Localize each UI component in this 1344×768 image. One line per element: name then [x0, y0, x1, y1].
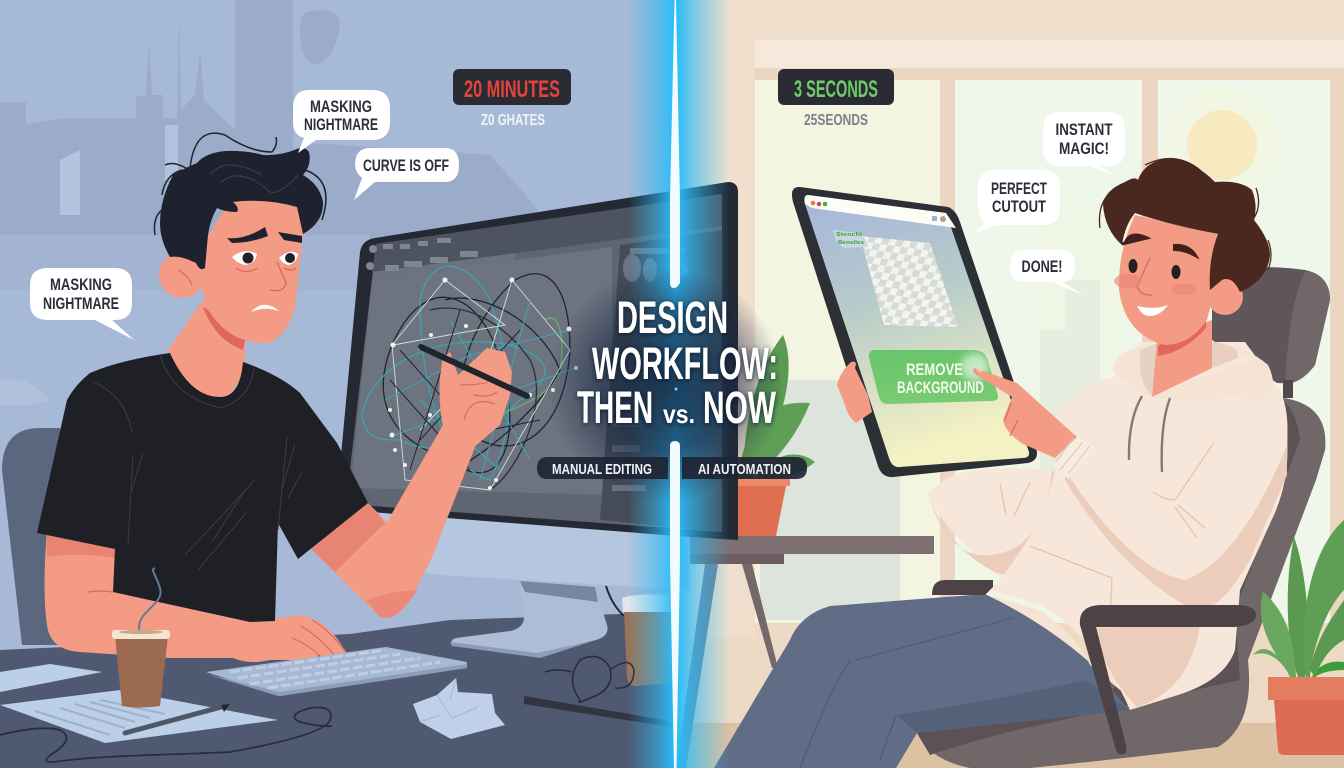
cable: [0, 708, 332, 762]
label pill: ai automation: [682, 457, 807, 479]
remove background button: BACKGROUND: [897, 378, 984, 397]
title: NOW: [703, 382, 776, 433]
label pill: ai automation: AI AUTOMATION: [698, 461, 791, 478]
hood: [1113, 345, 1273, 402]
brows: [227, 227, 268, 243]
speech bubble: masking nightmare left: [30, 268, 134, 340]
figure: stressed designer: [37, 133, 527, 664]
speech bubble: curve is off: CURVE IS OFF: [363, 156, 449, 175]
neck: [168, 300, 245, 402]
torso: [990, 342, 1287, 710]
speech bubble: perfect cutout: CUTOUT: [992, 197, 1046, 216]
badge: 3 seconds: [778, 69, 894, 129]
jeans: [714, 594, 1129, 768]
raised arm: [310, 425, 475, 618]
desk: [0, 612, 676, 768]
face: [1119, 215, 1220, 345]
speech bubble: done: DONE!: [1022, 257, 1062, 276]
speech bubble: masking nightmare left: NIGHTMARE: [43, 294, 119, 313]
badge: 20 minutes: Z0 GHATES: [481, 112, 545, 129]
speech bubble: curve is off: [354, 148, 459, 200]
eyes: [232, 251, 257, 265]
title: [577, 292, 778, 433]
monitor: [337, 182, 738, 658]
pointing hand: [973, 368, 1077, 458]
left hand on tablet: [837, 362, 872, 423]
tablet device: [792, 187, 1095, 479]
icon: keyboard: [206, 647, 467, 696]
speech bubble: masking nightmare top: [293, 90, 390, 153]
badge: 3 seconds: 3 SECONDS: [794, 76, 878, 103]
small card: Stenchi: [836, 232, 863, 238]
table and plant on right: [676, 335, 934, 768]
transparency checker: [860, 236, 958, 327]
badge: 3 seconds: 25SEONDS: [804, 112, 868, 129]
title: WORKFLOW:: [592, 338, 778, 389]
chart: tangled mask paths: [362, 266, 578, 490]
icon: coffee cup: [115, 636, 168, 708]
icon: crumpled paper: [413, 678, 505, 739]
badge: 20 minutes: [453, 69, 571, 129]
center glow band: [547, 0, 783, 768]
neck: [1152, 320, 1212, 397]
badge: 20 minutes: 20 MINUTES: [464, 76, 560, 103]
icon: papers: [0, 664, 102, 692]
plant right: [1253, 520, 1344, 755]
near sleeve: [1065, 410, 1287, 603]
shirt: [37, 353, 368, 622]
label pill: manual editing: MANUAL EDITING: [552, 461, 652, 478]
head: [200, 198, 303, 343]
icon: coffee cup right of desk: [622, 594, 676, 686]
divider: neon line: [670, 0, 680, 768]
title: DESIGN: [617, 292, 728, 343]
remove background button: REMOVE: [906, 360, 963, 379]
panel: then background: [0, 0, 676, 768]
tablet screen: [804, 195, 1029, 467]
title: vs.: [663, 399, 695, 429]
drawstrings: [1129, 396, 1170, 472]
remove background button: [869, 350, 998, 404]
far sleeve: [928, 468, 1100, 584]
speech bubble: done: [1010, 250, 1085, 296]
arm on keyboard: [44, 530, 347, 664]
hair: [1103, 158, 1270, 292]
small card: [833, 230, 868, 248]
hand: [440, 348, 512, 448]
chair: [1212, 267, 1330, 383]
speech bubble: instant magic: INSTANT: [1056, 120, 1113, 139]
speech bubble: perfect cutout: [975, 170, 1060, 233]
stylus: [421, 347, 527, 396]
speech bubble: masking nightmare top: MASKING: [310, 97, 372, 116]
speech bubble: instant magic: MAGIC!: [1059, 139, 1109, 158]
icon: glasses: [545, 656, 634, 702]
speech bubble: masking nightmare top: NIGHTMARE: [304, 115, 378, 134]
armrest: [1080, 605, 1256, 754]
title: THEN: [577, 382, 653, 433]
label pill: manual editing: [537, 457, 668, 479]
speech bubble: instant magic: [1043, 112, 1125, 177]
desk items: [0, 568, 676, 762]
panel: now background: [676, 0, 1344, 768]
figure: happy user: [714, 158, 1330, 768]
speech bubble: perfect cutout: PERFECT: [991, 179, 1047, 198]
small card: Beosiles: [838, 240, 864, 246]
speech bubble: masking nightmare left: MASKING: [50, 275, 112, 294]
chair left: [2, 428, 60, 645]
hair: [160, 148, 323, 269]
torso hem: [985, 594, 1137, 690]
